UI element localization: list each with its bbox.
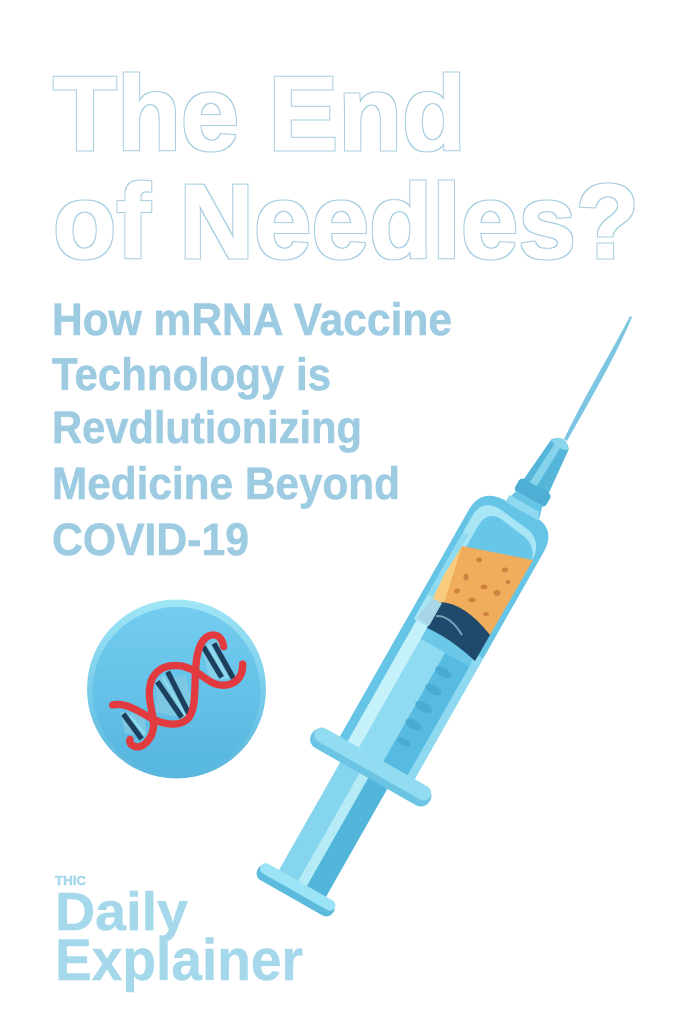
title: The End bbox=[53, 55, 466, 173]
vaccine liquid bbox=[432, 546, 533, 635]
subtitle bbox=[52, 294, 452, 565]
icon: DNA badge bbox=[87, 600, 266, 778]
subtitle: Medicine Beyond bbox=[52, 458, 400, 509]
needle bbox=[564, 316, 632, 441]
title: of Needles? bbox=[53, 163, 639, 281]
plunger bbox=[276, 757, 390, 903]
subtitle: Revdlutionizing bbox=[52, 402, 362, 453]
syringe body bbox=[236, 403, 618, 934]
finger flange bbox=[306, 724, 436, 810]
brand logo bbox=[55, 873, 303, 993]
title bbox=[53, 55, 639, 281]
brand logo: THIC bbox=[55, 873, 87, 888]
icon: syringe bbox=[236, 316, 632, 934]
brand logo: Daily bbox=[55, 882, 188, 942]
rubber stopper bbox=[417, 598, 490, 661]
subtitle: Technology is bbox=[52, 349, 331, 400]
lower barrel fill bbox=[334, 616, 416, 751]
nozzle bbox=[513, 430, 579, 508]
plunger thumb rest bbox=[254, 861, 338, 919]
brand logo: Explainer bbox=[55, 928, 303, 993]
barrel bbox=[334, 475, 563, 789]
subtitle: How mRNA Vaccine bbox=[52, 294, 452, 345]
subtitle: COVID-19 bbox=[52, 514, 249, 565]
